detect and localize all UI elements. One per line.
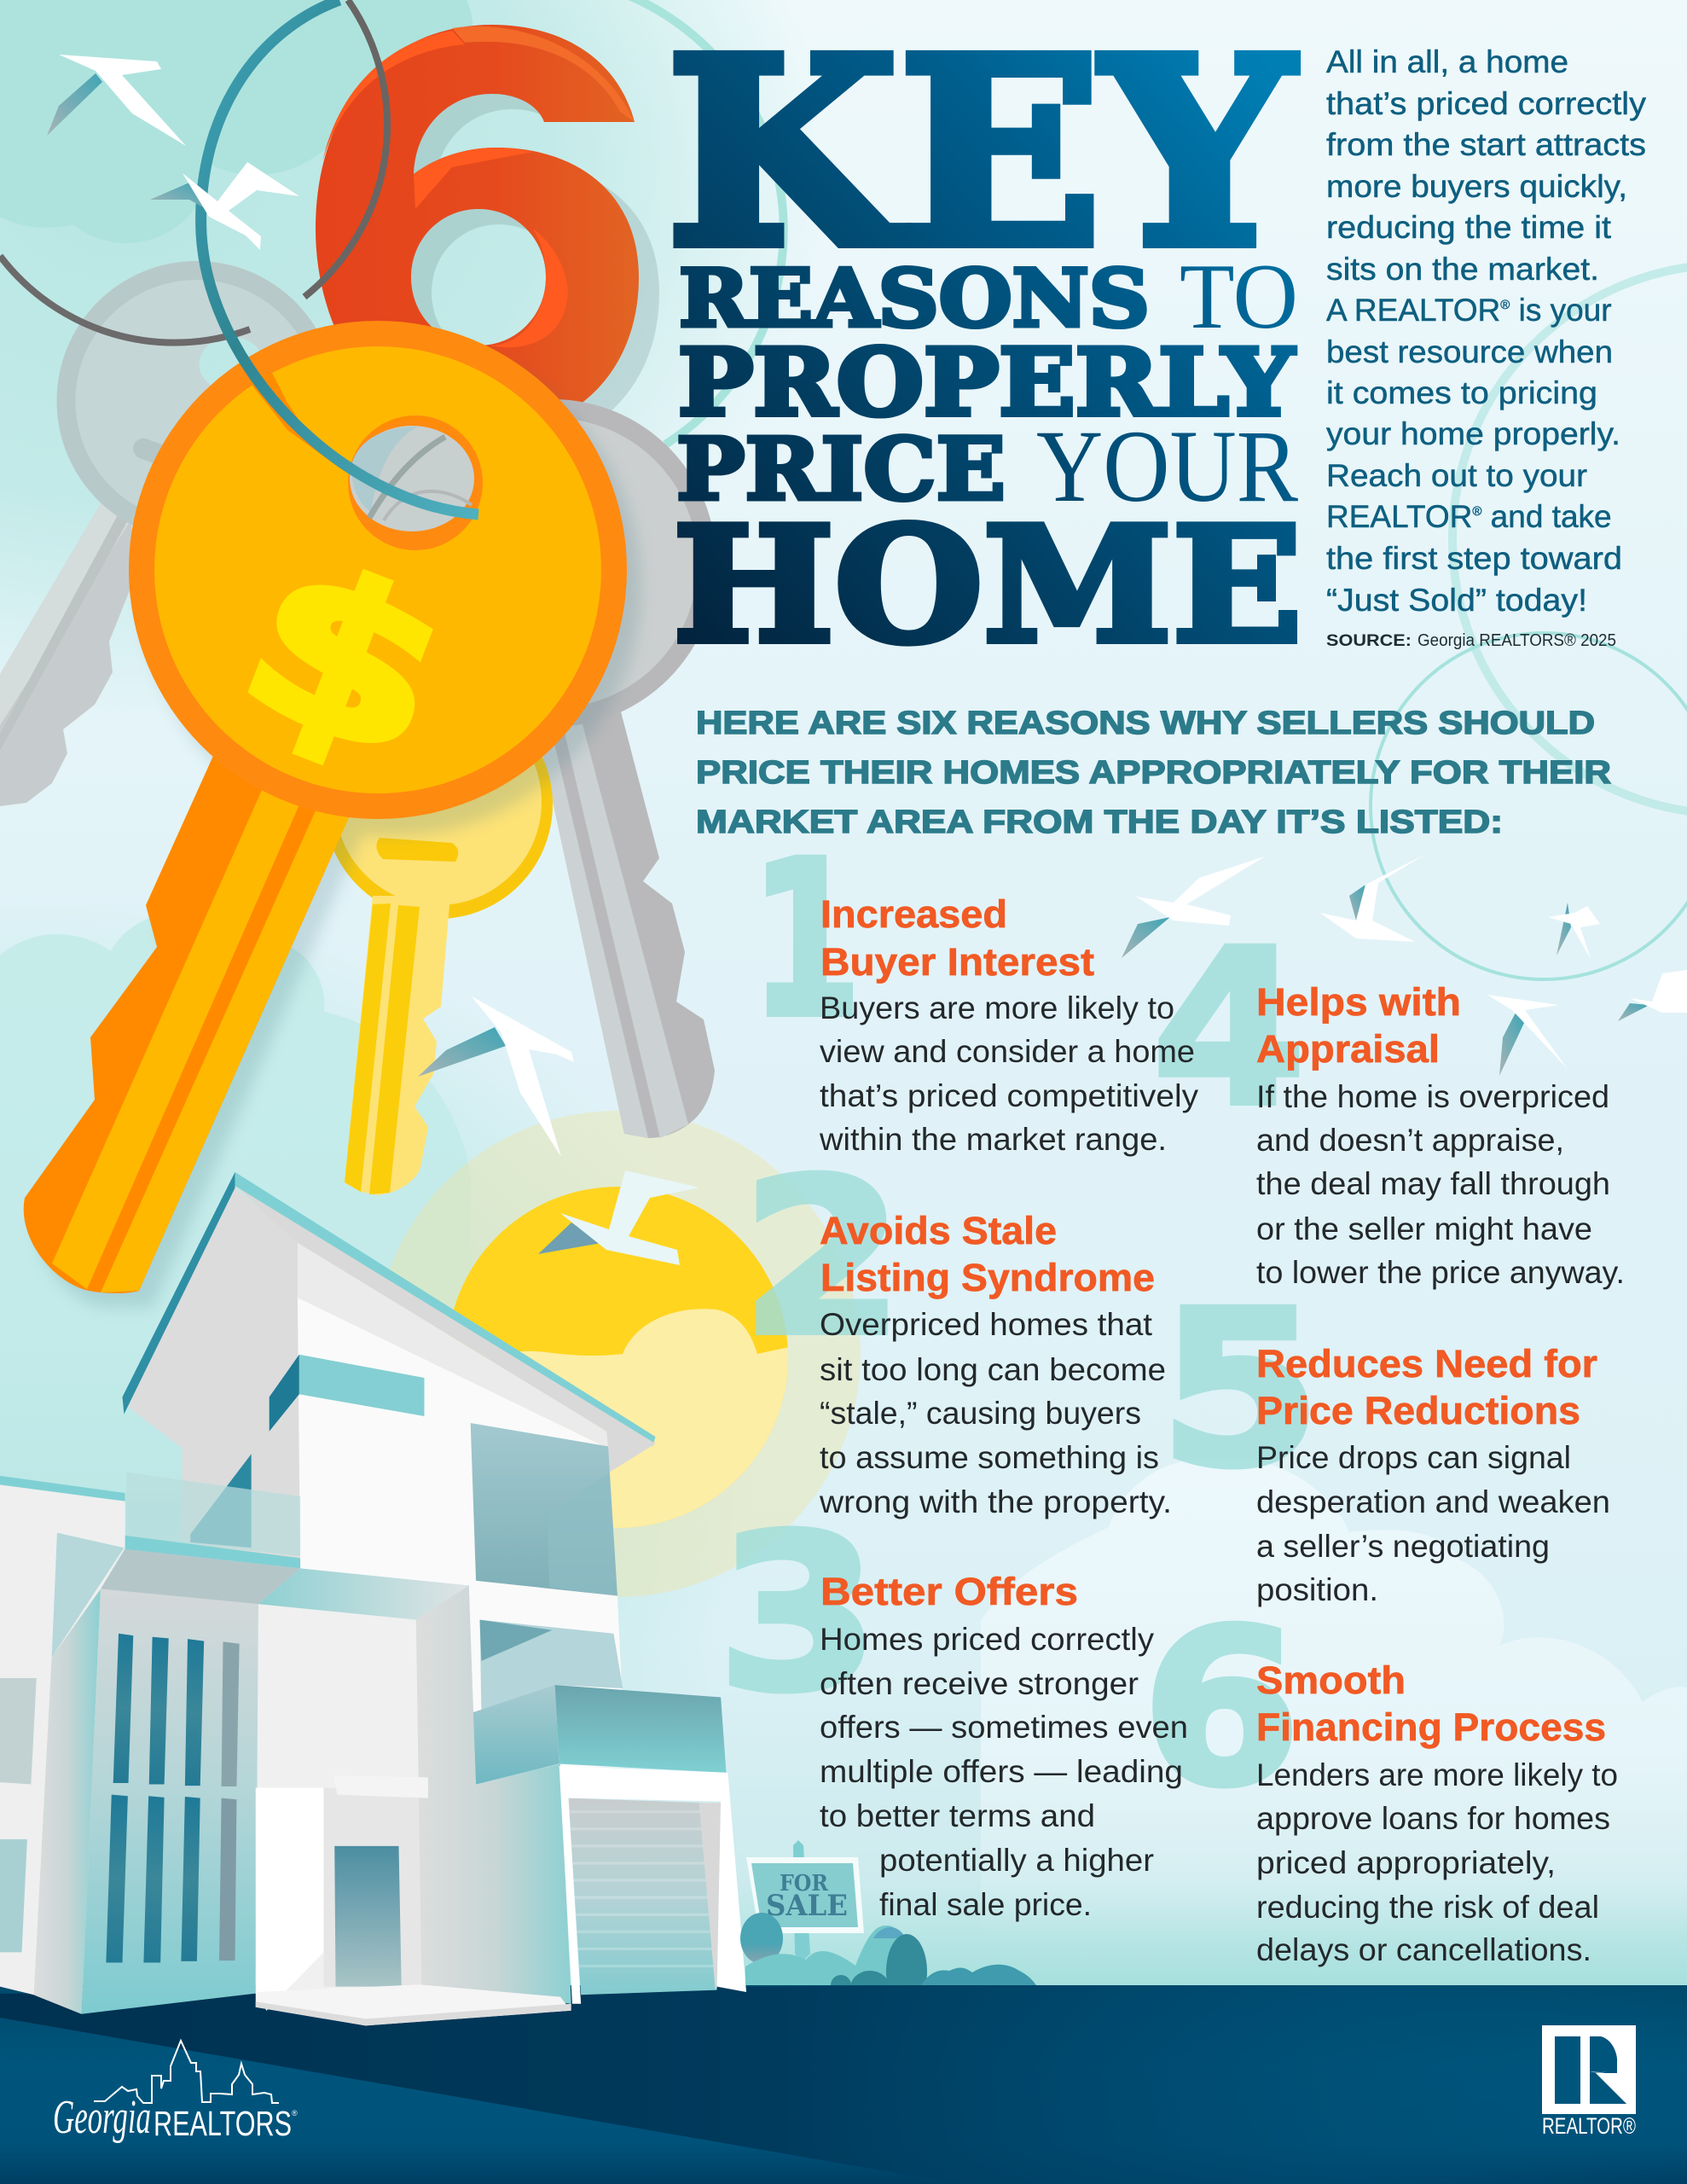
big number six [316, 25, 659, 450]
logo: Georgia REALTORS: REALTORS [154, 2104, 292, 2143]
intro paragraph: it comes to pricing [1326, 375, 1597, 410]
reason 4: or the seller might have [1256, 1211, 1592, 1246]
intro paragraph [1326, 44, 1647, 618]
reason 3: Homes priced correctly [820, 1622, 1155, 1657]
key: grey right [389, 399, 716, 1138]
bird 9 [538, 1170, 699, 1265]
title: KEY [666, 2, 1298, 305]
reason 4: and doesn’t appraise, [1256, 1123, 1564, 1158]
main upper wall [298, 1298, 625, 1767]
for sale sign [746, 1840, 864, 1962]
key shaft [527, 682, 715, 1138]
reason 2: wrong with the property. [819, 1484, 1172, 1519]
numerals: 4 [1152, 904, 1306, 1153]
reason 2: Overpriced homes that [820, 1307, 1153, 1342]
reason 5 [1256, 1342, 1610, 1607]
cloud: lower right [981, 1459, 1687, 1937]
reason 6: approve loans for homes [1256, 1801, 1610, 1836]
numerals: 6 [1142, 1584, 1301, 1833]
reason 3: Better Offers [820, 1570, 1078, 1613]
title: REASONS [679, 252, 1150, 345]
reason 1: within the market range. [819, 1122, 1167, 1157]
logo: Georgia REALTORS [53, 2041, 298, 2144]
title: TO [1180, 245, 1298, 348]
reason 4: to lower the price anyway. [1256, 1255, 1625, 1290]
key shadow [38, 338, 641, 1308]
reason 5: a seller’s negotiating [1256, 1529, 1550, 1564]
reason 3 [820, 1570, 1188, 1922]
intro paragraph: your home properly. [1326, 416, 1620, 451]
bird 8 [418, 996, 574, 1157]
source note: SOURCE: [1326, 632, 1412, 650]
reason 1: Buyer Interest [820, 940, 1094, 984]
front steps [256, 1984, 571, 2025]
title: PRICE [676, 419, 1006, 520]
reason 5: Price Reductions [1256, 1389, 1580, 1432]
reason 2: Listing Syndrome [820, 1256, 1155, 1299]
reason 6: priced appropriately, [1256, 1845, 1556, 1880]
numerals: 2 [741, 1134, 904, 1382]
reason 3: offers — sometimes even [820, 1710, 1188, 1745]
key head [129, 321, 627, 819]
key: grey left [0, 261, 337, 806]
for sale sign: FOR [780, 1871, 828, 1896]
decorative rings [618, 0, 1687, 979]
reason 4: Helps with [1256, 980, 1461, 1024]
reason 3: final sale price. [879, 1887, 1092, 1922]
intro paragraph: is your [1510, 293, 1612, 328]
intro paragraph: and take [1481, 499, 1612, 534]
sun with halo [374, 1111, 861, 1597]
center wall [256, 1604, 421, 2011]
footer band [0, 1985, 1687, 2184]
bird 1 [47, 55, 186, 146]
subheading: MARKET AREA FROM THE DAY IT’S LISTED: [696, 804, 1503, 840]
reason 2: to assume something is [820, 1440, 1159, 1475]
logo: Georgia REALTORS: Georgia [53, 2091, 151, 2144]
subheading: PRICE THEIR HOMES APPROPRIATELY FOR THEIR [696, 755, 1611, 791]
bird 7 [1618, 970, 1687, 1021]
source note [1326, 631, 1616, 650]
reason 1 [819, 892, 1199, 1157]
bushes [740, 1913, 1036, 1985]
bird 4 [1320, 855, 1424, 942]
title: YOUR [1036, 410, 1298, 524]
logo: Georgia REALTORS: ® [292, 2109, 298, 2117]
reason 3: to better terms and [820, 1798, 1095, 1833]
subheading [696, 706, 1611, 840]
numerals: 5 [1159, 1265, 1321, 1513]
reason 3: potentially a higher [879, 1843, 1154, 1878]
numerals [717, 816, 1321, 1833]
cloud: mid left [0, 911, 471, 1502]
birds [47, 55, 1687, 1265]
intro paragraph: Reach out to your [1326, 458, 1587, 493]
reason 2: Avoids Stale [820, 1209, 1057, 1252]
balcony [101, 1472, 469, 1620]
sign post [793, 1840, 810, 1962]
roof and gable [123, 1172, 656, 1568]
reason 6 [1256, 1658, 1618, 1967]
cloud: top left [0, 0, 473, 243]
title [666, 2, 1302, 678]
teal band and dark reveals [190, 1355, 424, 1548]
reason 4 [1256, 980, 1625, 1290]
intro paragraph: REALTOR [1326, 499, 1472, 534]
reason 6: Lenders are more likely to [1256, 1757, 1618, 1792]
intro paragraph: reducing the time it [1326, 210, 1612, 245]
door and canopy [333, 1775, 428, 1987]
intro paragraph: sits on the market. [1326, 252, 1599, 287]
reason 6: Financing Process [1256, 1705, 1606, 1749]
numerals: 1 [751, 816, 861, 1064]
reason 1: Buyers are more likely to [820, 990, 1174, 1025]
garage [559, 1766, 746, 2004]
for sale sign: SALE [766, 1889, 848, 1923]
intro paragraph: that’s priced correctly [1326, 86, 1647, 121]
title: HOME [673, 491, 1302, 678]
yellow key shaft [345, 896, 450, 1195]
intro paragraph: more buyers quickly, [1326, 169, 1627, 204]
reason 1: view and consider a home [820, 1034, 1195, 1069]
mid window [480, 1620, 623, 1712]
reason 6: delays or cancellations. [1256, 1932, 1591, 1967]
reason 2 [819, 1209, 1172, 1519]
reason 5: Price drops can signal [1256, 1440, 1571, 1475]
reason 4: Appraisal [1256, 1027, 1440, 1071]
intro paragraph: “Just Sold” today! [1326, 583, 1587, 618]
teal key ring [201, 0, 478, 514]
upper glass window [471, 1423, 617, 1596]
bird 6 [1487, 995, 1568, 1076]
intro paragraph: ® [1500, 298, 1510, 312]
reason 6: Smooth [1256, 1658, 1406, 1702]
key shaft [24, 756, 359, 1293]
grey key ring [0, 0, 387, 343]
far left wing [0, 1476, 125, 2014]
dollar sign: $ [212, 512, 478, 808]
numerals: 3 [717, 1490, 879, 1738]
bird 3 [1122, 857, 1265, 958]
intro paragraph: ® [1472, 504, 1481, 519]
reason 6: reducing the risk of deal [1256, 1890, 1599, 1925]
garage roof glass [473, 1685, 726, 1785]
lower left facade with slats [82, 1589, 258, 2014]
reason 1: that’s priced competitively [820, 1078, 1199, 1113]
intro paragraph: best resource when [1326, 334, 1613, 369]
title: PROPERLY [678, 329, 1296, 437]
intro paragraph: from the start attracts [1326, 127, 1646, 162]
key: small yellow [324, 690, 553, 1195]
key: main gold [24, 321, 627, 1293]
reason 4: If the home is overpriced [1256, 1079, 1609, 1114]
key hole [348, 415, 483, 550]
bird 2 [150, 162, 299, 250]
reason 3: multiple offers — leading [820, 1754, 1183, 1789]
reason 1: Increased [820, 892, 1007, 936]
reason 3: often receive stronger [820, 1666, 1139, 1701]
reason 2: sit too long can become [820, 1352, 1166, 1387]
reason 4: the deal may fall through [1256, 1166, 1610, 1201]
reason 5: desperation and weaken [1256, 1484, 1610, 1519]
intro paragraph: the first step toward [1326, 541, 1622, 576]
reason 5: position. [1256, 1572, 1378, 1607]
right shaded wall [416, 1586, 571, 2004]
bird 5 [1548, 903, 1600, 959]
house illustration [0, 1172, 746, 2025]
logo: REALTOR [1542, 2025, 1636, 2139]
logo: REALTOR: REALTOR® [1542, 2113, 1636, 2139]
source note: Georgia REALTORS® 2025 [1417, 631, 1616, 650]
reason 2: “stale,” causing buyers [820, 1396, 1141, 1431]
reason 5: Reduces Need for [1256, 1342, 1597, 1385]
subheading: HERE ARE SIX REASONS WHY SELLERS SHOULD [696, 706, 1595, 741]
intro paragraph: A REALTOR [1326, 293, 1500, 328]
intro paragraph: All in all, a home [1326, 44, 1568, 79]
